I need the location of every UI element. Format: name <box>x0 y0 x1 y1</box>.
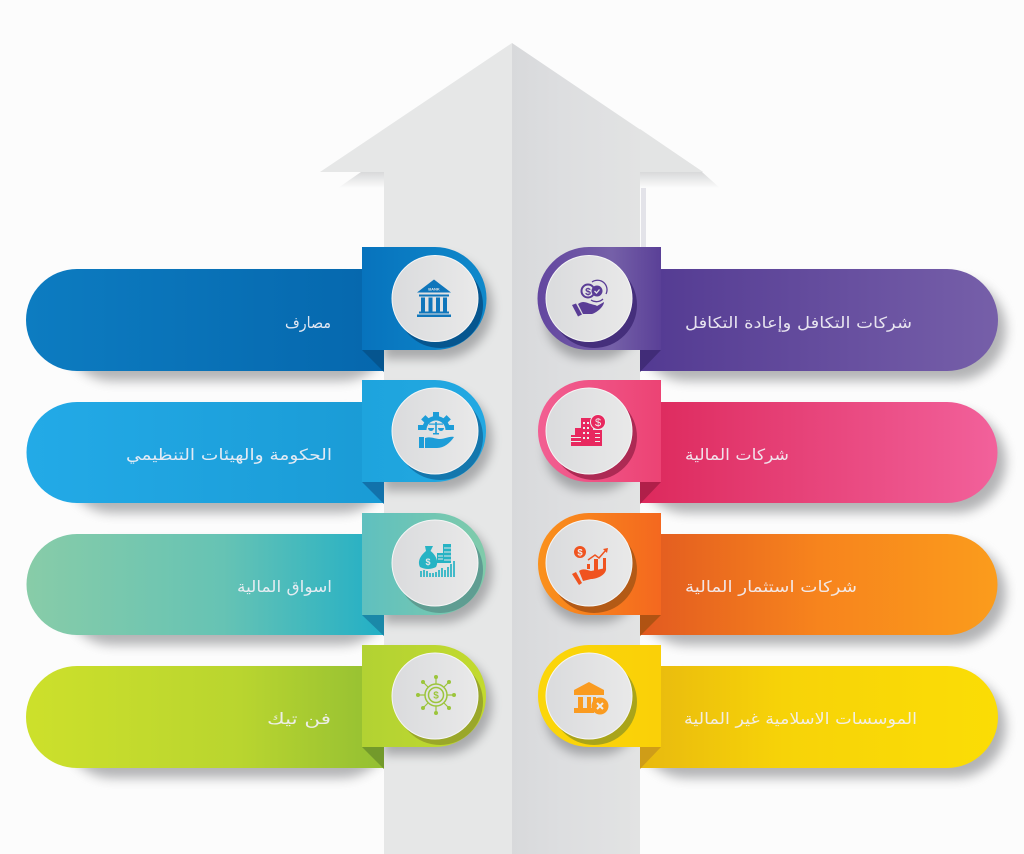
tab: left 2 <box>362 380 486 482</box>
icon: bank with cross <box>574 682 608 714</box>
label: left 2: الحكومة والهيئات التنظيمي <box>126 446 332 465</box>
icon: network coin: $ <box>433 690 439 702</box>
label: right 4: الموسسات الاسلامية غير المالية <box>684 710 917 728</box>
right bar 4 <box>640 666 998 768</box>
icon: bank: BANK <box>428 286 440 292</box>
circles <box>392 256 632 739</box>
label: right 1: شركات التكافل وإعادة التكافل <box>685 314 912 333</box>
label: left 4: فن تيك <box>267 710 331 728</box>
tab: left 4 <box>362 645 486 747</box>
icon: hand with growth chart <box>572 546 608 585</box>
central up arrow <box>320 43 703 854</box>
fold triangles <box>362 350 661 769</box>
icon: network coin <box>416 675 456 715</box>
label: right 2: شركات المالية <box>685 446 789 464</box>
right bar 2 <box>640 402 998 503</box>
left bar 1 <box>26 269 384 371</box>
icon: buildings and coin: $ <box>595 417 601 429</box>
label: right 3: شركات استثمار المالية <box>685 578 857 596</box>
icon: hand with growth chart: $ <box>577 548 583 558</box>
arrow head shadows <box>338 172 720 248</box>
left bar 4 <box>26 666 384 768</box>
icon: hand with coins <box>572 280 607 316</box>
right bar 3 <box>640 534 998 635</box>
tab: left 3 <box>362 513 486 615</box>
icon: buildings and coin <box>571 414 606 446</box>
label: left 1: مصارف <box>285 314 331 332</box>
tab: right 4 <box>538 645 661 747</box>
icon: money bag and city chart: $ <box>425 557 431 567</box>
icon: money bag and city chart <box>419 544 454 577</box>
tab: right 1 <box>538 247 661 350</box>
left bar 2 <box>27 402 384 503</box>
circle crescents <box>397 262 637 745</box>
tab: left 1 <box>362 247 486 350</box>
icon: bank <box>417 280 451 317</box>
icon: gear, scales and hand <box>418 412 454 448</box>
tab: right 2 <box>538 380 661 482</box>
tab: right 3 <box>538 513 661 615</box>
right bar 1 <box>640 269 998 371</box>
bar shadows <box>62 279 1006 778</box>
label: left 3: اسواق المالية <box>237 578 332 596</box>
icon: hand with coins: $ <box>585 286 591 298</box>
left bar 3 <box>27 534 384 635</box>
tab shadows <box>384 256 640 755</box>
